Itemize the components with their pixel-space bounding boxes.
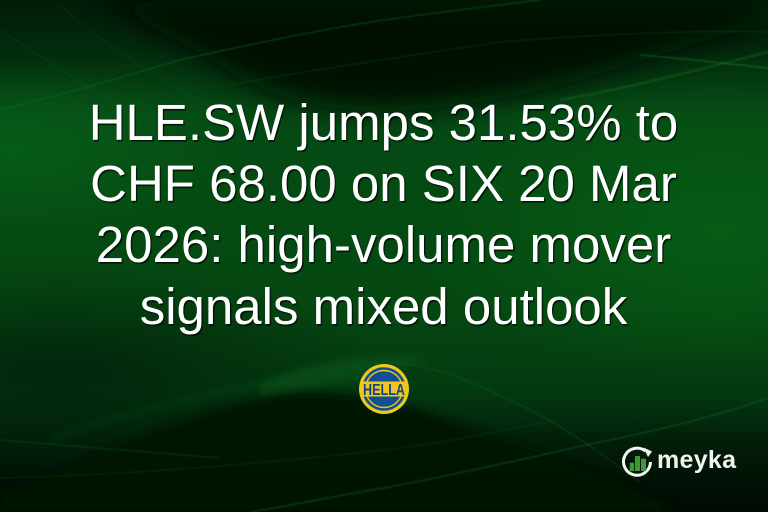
- icon: HELLA logo: [359, 364, 409, 414]
- wordmark: meyka: [657, 446, 736, 474]
- logo: meyka: [622, 446, 736, 477]
- title: [89, 94, 678, 336]
- icon: meyka chart ring: [622, 446, 652, 477]
- title: 2026: high-volume mover: [96, 216, 671, 273]
- title: CHF 68.00 on SIX 20 Mar: [90, 155, 677, 212]
- title: HLE.SW jumps 31.53% to: [89, 94, 678, 151]
- title: signals mixed outlook: [140, 278, 627, 335]
